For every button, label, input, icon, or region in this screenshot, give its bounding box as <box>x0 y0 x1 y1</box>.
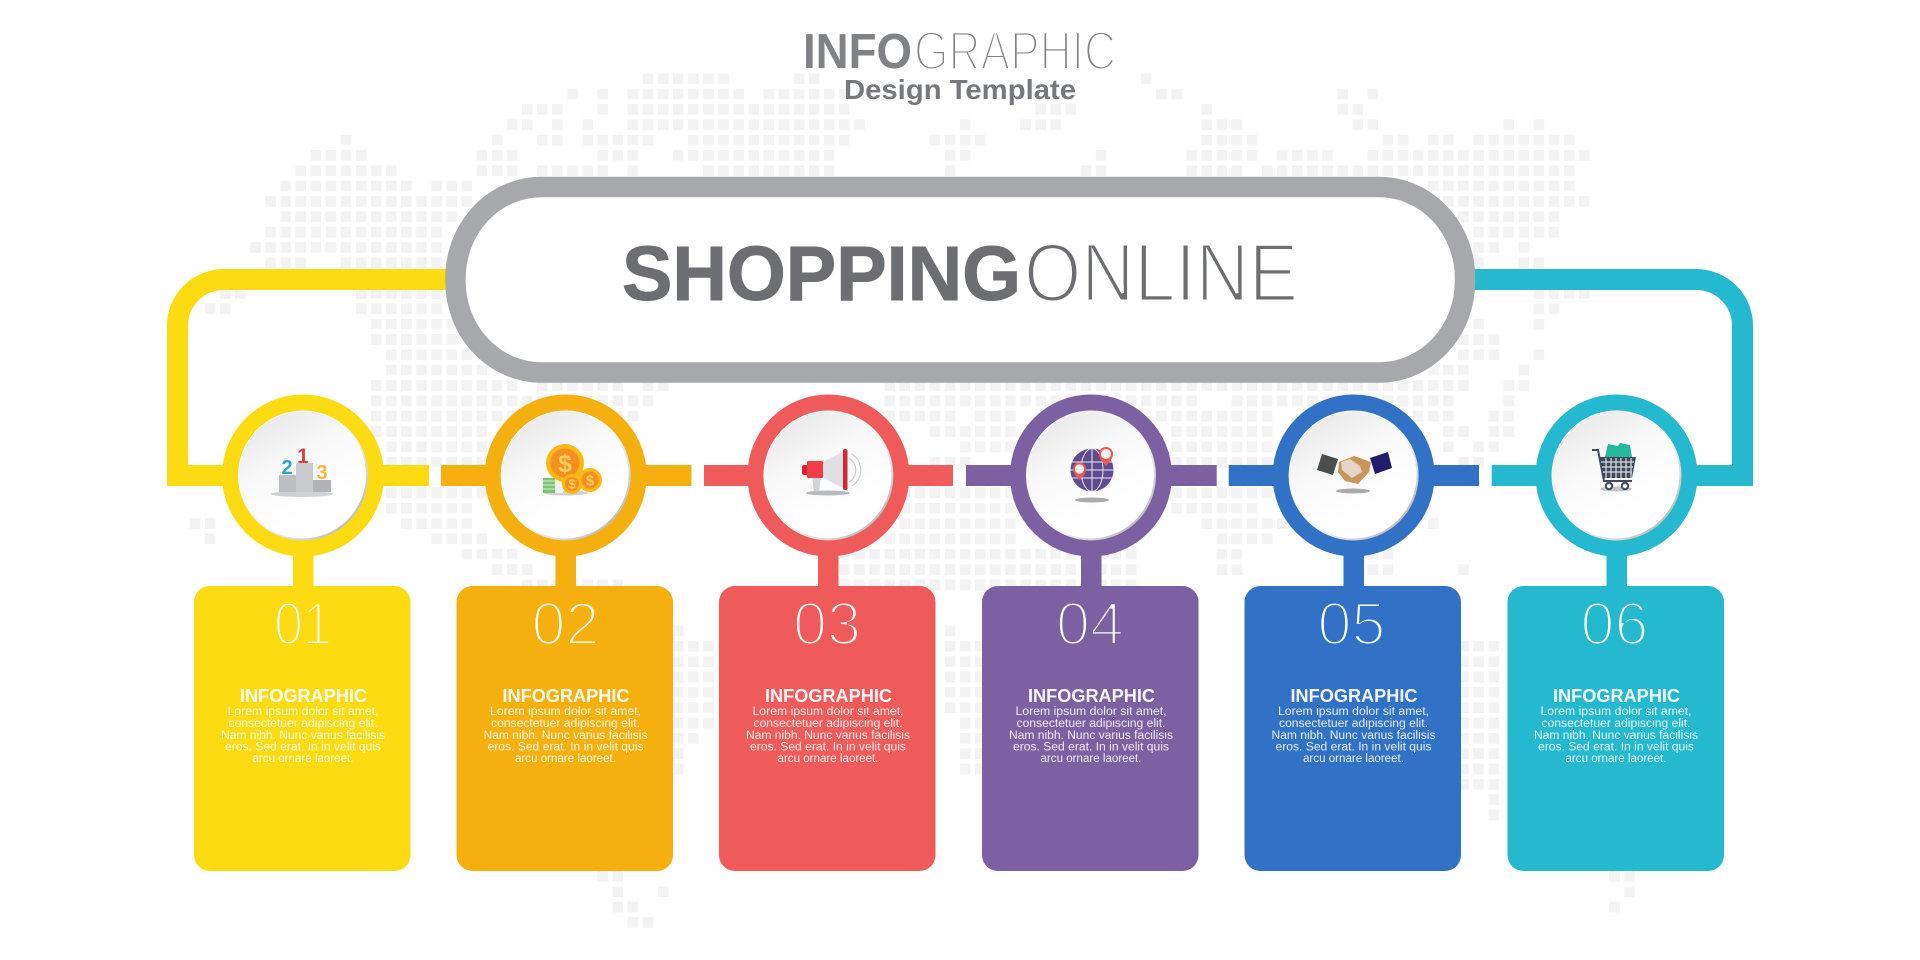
card text: consectetuer adipiscing elit. <box>1279 718 1428 730</box>
icon: coins: $ <box>568 476 576 492</box>
card text <box>1534 685 1698 765</box>
card text <box>221 685 385 765</box>
card text: Lorem ipsum dolor sit amet, <box>228 706 378 718</box>
connector <box>1229 465 1479 486</box>
card text: arcu ornare laoreet. <box>778 753 878 765</box>
title text: ONLINE <box>1024 226 1298 319</box>
card text: eros. Sed erat. In in velit quis <box>1538 742 1694 754</box>
card text: INFOGRAPHIC <box>1553 685 1680 706</box>
step 4: purple <box>966 394 1217 871</box>
card text <box>1272 685 1436 765</box>
card <box>982 586 1198 871</box>
step 1: yellow <box>194 394 410 871</box>
card text: Lorem ipsum dolor sit amet, <box>1540 706 1692 718</box>
dotted world map background <box>190 79 1635 922</box>
connector: teal line from title panel to step 6 <box>1465 280 1742 476</box>
number: 03 <box>793 590 861 658</box>
card text: INFOGRAPHIC <box>502 685 630 706</box>
step 5: blue <box>1229 394 1479 871</box>
card text: Lorem ipsum dolor sit amet, <box>1016 706 1166 718</box>
heading: INFOGRAPHIC: INFO <box>803 25 912 79</box>
ring <box>1010 394 1172 556</box>
ring <box>485 394 647 556</box>
card text <box>1009 685 1173 765</box>
card text: arcu ornare laoreet. <box>1303 753 1404 765</box>
card text: consectetuer adipiscing elit. <box>228 718 378 730</box>
card text: INFOGRAPHIC <box>1028 685 1155 706</box>
icon: coins <box>543 444 602 496</box>
ring <box>1536 394 1698 556</box>
stem <box>818 545 838 590</box>
card <box>1244 586 1461 871</box>
card text: eros. Sed erat. In in velit quis <box>1013 742 1169 754</box>
card text: eros. Sed erat. In in velit quis <box>1276 742 1432 754</box>
card text <box>484 685 648 765</box>
card text: consectetuer adipiscing elit. <box>1016 718 1166 730</box>
card text: Nam nibh. Nunc varius facilisis <box>221 730 385 742</box>
ring <box>222 394 384 556</box>
step 6: teal <box>1508 394 1724 871</box>
number: 02 <box>532 590 600 658</box>
title text <box>622 226 1298 319</box>
card text: INFOGRAPHIC <box>765 685 892 706</box>
card text <box>746 685 910 765</box>
stem <box>293 545 314 590</box>
card text: eros. Sed erat. In in velit quis <box>488 742 644 754</box>
icon: podium: 3 <box>316 462 328 484</box>
card text: arcu ornare laoreet. <box>515 753 616 765</box>
heading: INFOGRAPHIC: GRAPHIC <box>914 20 1116 82</box>
step 3: red <box>704 394 953 871</box>
card text: eros. Sed erat. In in velit quis <box>750 742 906 754</box>
number: 06 <box>1580 590 1648 658</box>
card <box>194 586 410 871</box>
icon: podium: 1 <box>297 445 309 468</box>
card text: Lorem ipsum dolor sit amet, <box>490 706 641 718</box>
card text: consectetuer adipiscing elit. <box>1542 718 1690 730</box>
card text: Nam nibh. Nunc varius facilisis <box>484 730 648 742</box>
heading: INFOGRAPHIC <box>803 20 1116 82</box>
card text: consectetuer adipiscing elit. <box>754 718 902 730</box>
icon: globe with pins <box>1070 447 1114 502</box>
header title <box>803 20 1116 105</box>
icon: megaphone <box>802 449 861 496</box>
ring <box>1273 394 1435 556</box>
card text: arcu ornare laoreet. <box>1566 753 1666 765</box>
stem <box>1081 545 1102 590</box>
icon: shopping cart <box>1592 443 1636 492</box>
number: 05 <box>1318 590 1386 658</box>
connector <box>966 465 1217 486</box>
panel: shopping online title <box>456 187 1465 372</box>
card text: arcu ornare laoreet. <box>252 753 354 765</box>
icon: podium: 2 <box>281 457 293 479</box>
card text: Nam nibh. Nunc varius facilisis <box>1272 730 1436 742</box>
card text: Lorem ipsum dolor sit amet, <box>1278 706 1429 718</box>
card text: Nam nibh. Nunc varius facilisis <box>1009 730 1173 742</box>
card <box>1508 586 1724 871</box>
connector: yellow line from title panel to step 1 <box>178 280 455 476</box>
number: 01 <box>274 590 332 658</box>
icon: coins: $ <box>558 450 572 478</box>
icon: handshake <box>1317 452 1392 494</box>
card <box>719 586 936 871</box>
title text: SHOPPING <box>622 231 1021 317</box>
icon: coins: $ <box>586 472 595 490</box>
card text: Nam nibh. Nunc varius facilisis <box>746 730 910 742</box>
stem <box>1344 545 1364 590</box>
card text: Nam nibh. Nunc varius facilisis <box>1534 730 1698 742</box>
card <box>456 586 673 871</box>
stem <box>1606 545 1627 590</box>
ring <box>747 394 909 556</box>
connector <box>704 465 953 486</box>
card text: eros. Sed erat. In in velit quis <box>225 742 381 754</box>
stem <box>556 545 576 590</box>
card text: INFOGRAPHIC <box>1290 685 1418 706</box>
icon: podium <box>271 445 333 497</box>
step 2: orange <box>441 394 692 871</box>
card text: consectetuer adipiscing elit. <box>491 718 640 730</box>
card text: INFOGRAPHIC <box>240 685 367 706</box>
card text: Lorem ipsum dolor sit amet, <box>752 706 904 718</box>
card text: arcu ornare laoreet. <box>1040 753 1142 765</box>
connector <box>441 465 692 486</box>
number: 04 <box>1056 590 1124 658</box>
subheading: Design Template: Design Template <box>844 74 1076 105</box>
